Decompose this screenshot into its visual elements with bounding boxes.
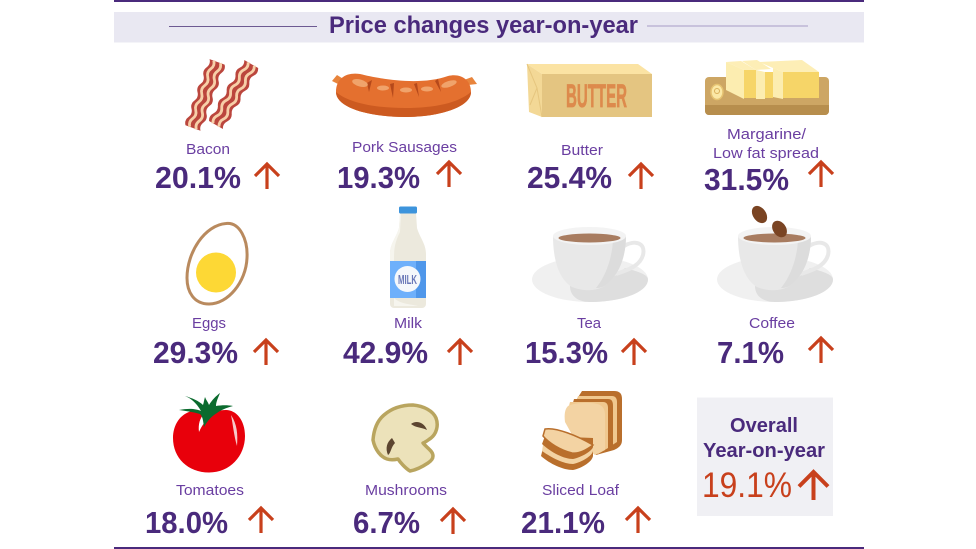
value: 18.0% [145, 505, 228, 540]
label line 1: Margarine/ [727, 126, 807, 143]
arrow up [437, 162, 461, 187]
item: eggs [153, 223, 278, 370]
label: Milk [394, 315, 423, 332]
arrow up [441, 509, 465, 534]
arrow up [622, 340, 646, 365]
arrow up [626, 508, 650, 533]
arrow up [249, 508, 273, 533]
label: Tea [577, 315, 602, 332]
value: 31.5% [704, 162, 789, 197]
value: 7.1% [717, 335, 784, 370]
item: tomatoes [145, 393, 273, 540]
panel heading line 2: Year-on-year [703, 440, 825, 462]
arrow up [448, 340, 472, 365]
label: Bacon [186, 141, 230, 158]
label: Sliced Loaf [542, 482, 620, 499]
arrow up [255, 164, 279, 189]
icon: milk bottle [390, 206, 426, 308]
label: Coffee [749, 315, 795, 332]
icon: coffee cup and beans [717, 203, 833, 302]
icon: sausage [332, 74, 477, 117]
icon: margarine on board [705, 60, 829, 115]
item: sliced loaf [521, 391, 650, 540]
panel: overall year-on-year [697, 398, 833, 516]
icon: butter pack: BUTTER [566, 78, 627, 114]
item: bacon [155, 59, 279, 195]
item: tea [525, 227, 648, 370]
title: Price changes year-on-year [329, 12, 638, 39]
arrow up [809, 162, 833, 187]
label: Butter [561, 142, 603, 159]
icon: tea cup [532, 227, 648, 302]
item: mushrooms [353, 405, 465, 540]
item: butter [527, 64, 653, 195]
label line 2: Low fat spread [713, 145, 819, 162]
value: 21.1% [521, 505, 605, 540]
value: 42.9% [343, 335, 428, 370]
overall arrow up [799, 472, 828, 500]
value: 19.3% [337, 160, 420, 195]
arrow up [254, 340, 278, 365]
panel heading line 1: Overall [730, 415, 798, 437]
icon: bacon [184, 59, 259, 131]
item: pork sausages [332, 74, 477, 195]
icon: tomato [173, 393, 245, 472]
icon: egg [187, 223, 247, 304]
value: 15.3% [525, 335, 608, 370]
value: 29.3% [153, 335, 238, 370]
label: Pork Sausages [352, 139, 457, 156]
overall value: 19.1% [702, 466, 792, 505]
label: Tomatoes [176, 482, 244, 499]
value: 20.1% [155, 160, 241, 195]
arrow up [809, 338, 833, 363]
value: 25.4% [527, 160, 612, 195]
arrow up [629, 164, 653, 189]
item: milk [343, 206, 472, 370]
item: margarine [704, 60, 833, 197]
label: Eggs [192, 315, 226, 332]
icon: mushroom [373, 405, 437, 471]
heading band [114, 12, 864, 42]
icon: sliced loaf [541, 391, 622, 470]
icon: milk bottle: MILK [398, 272, 417, 287]
item: coffee [717, 203, 833, 370]
label: Mushrooms [365, 482, 447, 499]
value: 6.7% [353, 505, 420, 540]
